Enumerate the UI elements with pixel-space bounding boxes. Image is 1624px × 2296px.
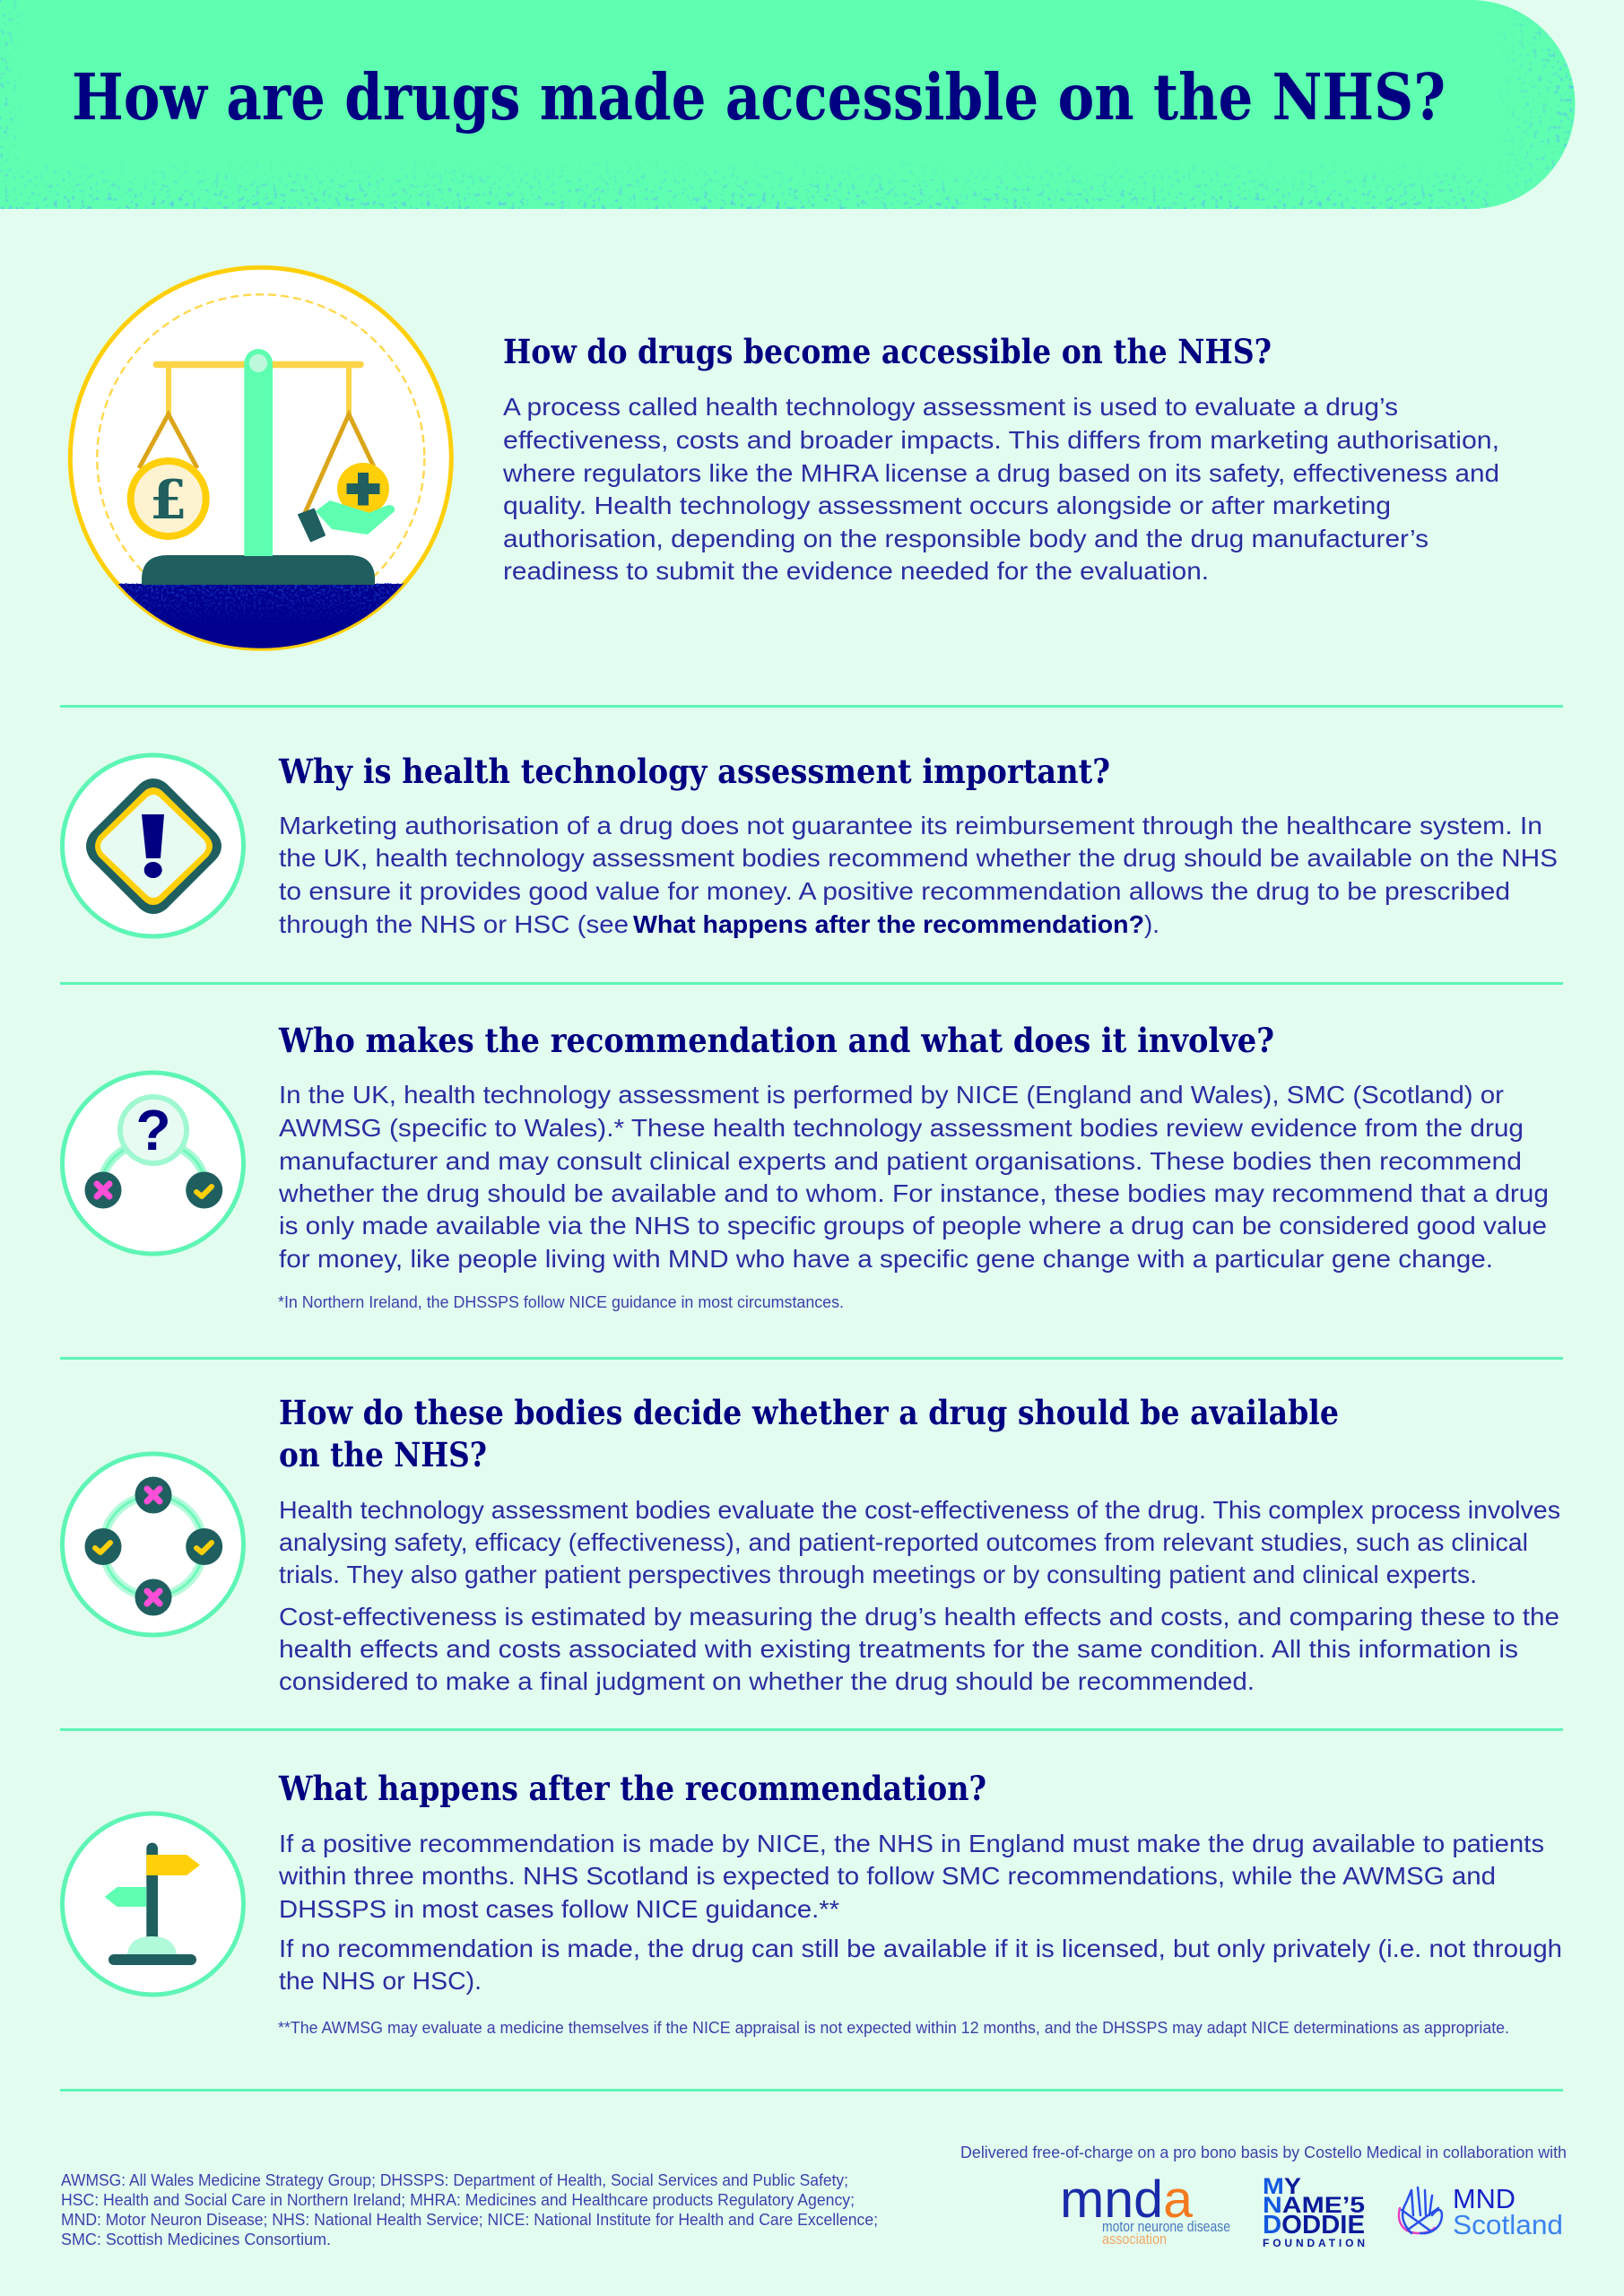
abbreviations text block: SMC: Scottish Medicines Consortium. [61,2231,331,2248]
body text: analysing safety, efficacy (effectiveness), and patient-reported outcomes from relevant studies, such as clinical [279,1528,1528,1556]
body text: the UK, health technology assessment bodies recommend whether the drug should be available on the NHS [279,844,1558,872]
body text: Cost-effectiveness is estimated by measuring the drug’s health effects and costs, and comparing these to the [279,1603,1559,1631]
body text: effectiveness, costs and broader impacts. This differs from marketing authorisation, [503,426,1499,454]
body text: A process called health technology assessment is used to evaluate a drug’s [503,393,1398,421]
body text: where regulators like the MHRA license a drug based on its safety, effectiveness and [502,459,1499,487]
heading: How do drugs become accessible on the NHS? [503,332,1272,371]
body text: trials. They also gather patient perspectives through meetings or by consulting patient and clinical experts. [279,1561,1477,1588]
body text: is only made available via the NHS to specific groups of people where a drug can be considered good value [279,1212,1547,1239]
heading: Why is health technology assessment important? [278,752,1110,791]
logo: MND Scotland: Scotland [1453,2209,1563,2240]
icon: question with two outcomes: ? [135,1098,171,1162]
logo: My Name'5 Doddie Foundation: MY [1263,2174,1301,2199]
body text: In the UK, health technology assessment is performed by NICE (England and Wales), SMC (Scotland) or [279,1081,1504,1109]
abbreviations text block [61,2171,878,2248]
logo: mnda: motor neurone disease [1102,2218,1230,2235]
body text: to ensure it provides good value for money. A positive recommendation allows the drug to be prescribed [279,877,1510,905]
header banner with title [0,0,1624,209]
logo: My Name'5 Doddie Foundation: FOUNDATION [1263,2237,1365,2249]
icon: pound coin [131,461,206,536]
body text: for money, like people living with MND who have a specific gene change with a particular gene change. [279,1245,1493,1273]
logo: MND Scotland: MND [1453,2183,1515,2214]
body text: whether the drug should be available and to whom. For instance, these bodies may recommend that a drug [278,1179,1549,1207]
title: How are drugs made accessible on the NHS? [72,59,1446,135]
icon: hand holding medical cross coin [299,463,395,541]
logo: mnda: mnda [1060,2170,1194,2229]
heading: How do these bodies decide whether a drug should be available [279,1393,1339,1432]
icon: question with two outcomes [63,1073,244,1254]
icon: decision ring with ticks and crosses [63,1454,244,1635]
body text: ). [1144,910,1159,938]
body text [278,1081,1549,1273]
heading: Who makes the recommendation and what does it involve? [278,1021,1274,1060]
footnote: *In Northern Ireland, the DHSSPS follow NICE guidance in most circumstances. [278,1293,844,1311]
body text: manufacturer and may consult clinical experts and patient organisations. These bodies then recommend [279,1147,1522,1175]
icon: signpost [63,1813,244,1995]
body text: quality. Health technology assessment occurs alongside or after marketing [503,491,1391,519]
panel: how do these bodies decide [279,1393,1560,1695]
body text: within three months. NHS Scotland is expected to follow SMC recommendations, while the AWMSG and [278,1862,1496,1890]
abbreviations text block: AWMSG: All Wales Medicine Strategy Group; DHSSPS: Department of Health, Social Services and Public Safety; [61,2171,848,2189]
logo: My Name'5 Doddie Foundation: DODDIE [1263,2211,1365,2239]
footnote: **The AWMSG may evaluate a medicine themselves if the NICE appraisal is not expected within 12 months, and the DHSSPS may adapt NICE determinations as appropriate. [278,2019,1509,2037]
body text [279,812,1558,938]
body text: the NHS or HSC). [279,1967,482,1995]
body text: health effects and costs associated with existing treatments for the same condition. All this information is [279,1635,1518,1663]
credit line: Delivered free-of-charge on a pro bono basis by Costello Medical in collaboration with [960,2144,1567,2161]
body text: If a positive recommendation is made by NICE, the NHS in England must make the drug available to patients [279,1830,1544,1857]
icon: pound coin: £ [150,469,187,532]
abbreviations text block: MND: Motor Neuron Disease; NHS: National Health Service; NICE: National Institute for Health and Care Excellence; [61,2211,878,2229]
icon: balance scales weighing money against health [63,267,457,656]
body text: readiness to submit the evidence needed for the evaluation. [503,557,1209,585]
logo: My Name'5 Doddie Foundation: NAME’5 [1263,2193,1365,2218]
panel: how do drugs become accessible [502,332,1499,585]
heading: on the NHS? [279,1435,487,1474]
logo: MND Scotland [1399,2183,1563,2240]
heading [279,1393,1339,1474]
body text: considered to make a final judgment on whether the drug should be recommended. [279,1667,1255,1695]
body text: Marketing authorisation of a drug does not guarantee its reimbursement through the healthcare system. In [279,812,1542,839]
panel: why is health technology assessment important [278,752,1558,938]
body text: What happens after the recommendation? [633,910,1144,938]
icon: warning diamond with exclamation mark [63,755,244,936]
body text: AWMSG (specific to Wales).* These health technology assessment bodies review evidence from the drug [279,1114,1524,1142]
body text: DHSSPS in most cases follow NICE guidance.** [279,1895,839,1923]
body text [278,1830,1562,1995]
abbreviations text block: HSC: Health and Social Care in Northern Ireland; MHRA: Medicines and Healthcare products Regulatory Agency; [61,2191,855,2209]
logo: mnda [1060,2170,1230,2248]
body text: authorisation, depending on the responsible body and the drug manufacturer’s [503,525,1429,552]
panel: who makes the recommendation [278,1021,1549,1311]
logo: mnda: association [1102,2231,1167,2248]
body text: If no recommendation is made, the drug can still be available if it is licensed, but only privately (i.e. not through [279,1935,1562,1962]
body text [502,393,1499,585]
body text: through the NHS or HSC (see [279,910,629,938]
body text [279,1496,1560,1695]
body text: Health technology assessment bodies evaluate the cost-effectiveness of the drug. This complex process involves [279,1496,1560,1524]
heading: What happens after the recommendation? [278,1769,986,1808]
panel: what happens after the recommendation [278,1769,1562,2037]
logo: My Name'5 Doddie Foundation [1263,2174,1365,2249]
